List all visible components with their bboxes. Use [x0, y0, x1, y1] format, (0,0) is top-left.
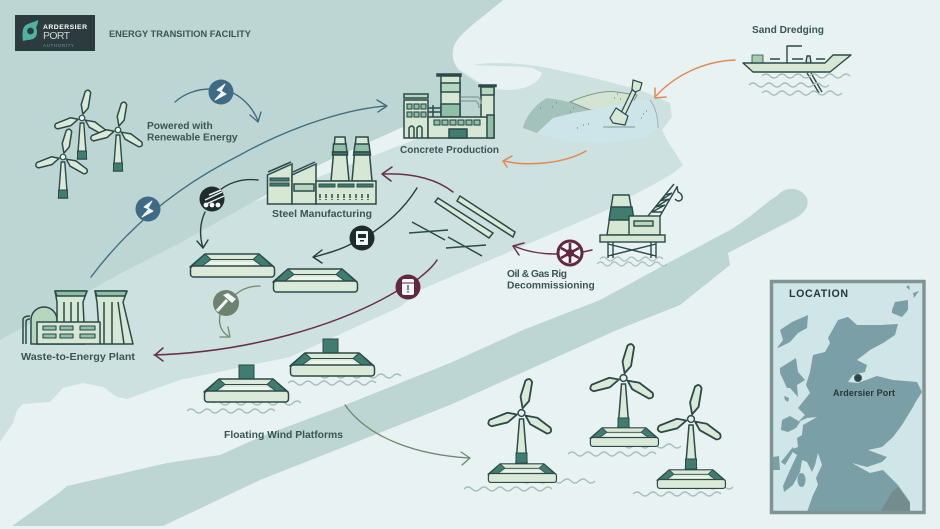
- background: mid land band: [0, 63, 683, 442]
- wind turbines: onshore group: [35, 89, 144, 198]
- arrow: platforms to offshore: [345, 405, 470, 465]
- floating turbine 1: [464, 378, 595, 491]
- label: oil and gas rig decommissioning: Decommissioning: [507, 280, 595, 292]
- icon: waste-to-energy plant: [23, 291, 133, 344]
- front mound: [537, 100, 658, 143]
- icon: lightning in circle: [136, 196, 160, 222]
- floating turbine 2: [568, 343, 681, 456]
- floating platform B with waves: [288, 339, 401, 385]
- label: powered with renewable energy: Renewable Energy: [147, 132, 238, 144]
- panel: location map: [772, 282, 924, 512]
- label: powered with renewable energy: Powered with: [147, 121, 213, 132]
- label: oil and gas rig decommissioning: Oil & Gas Rig: [507, 269, 567, 280]
- arrow: renewable power: [175, 89, 261, 122]
- arrow: steel to platform: [197, 180, 258, 248]
- title: ENERGY TRANSITION FACILITY: [109, 28, 252, 39]
- label: ardersier port: Ardersier Port: [833, 388, 895, 398]
- arrow: waste energy to concrete: [91, 100, 387, 277]
- label: sand dredging: Sand Dredging: [752, 25, 824, 36]
- icon: decommissioned steel beams: [409, 196, 515, 256]
- icon: recycle in circle: [558, 241, 582, 265]
- sand heap: [523, 80, 658, 143]
- label: floating wind platforms: Floating Wind Platforms: [224, 430, 343, 441]
- icon: lightning in circle: [208, 80, 234, 104]
- icon: dredging ship: [743, 46, 851, 93]
- waves under ship: [749, 74, 850, 95]
- map marker: [854, 374, 862, 382]
- label: steel manufacturing: Steel Manufacturing: [272, 209, 372, 220]
- arrow: rig to beams: [513, 243, 592, 255]
- logo: PORT: [43, 30, 71, 42]
- background: diagonal sandbank band: [12, 189, 808, 526]
- arrow: scrap to waste energy: [154, 260, 437, 361]
- icon: offshore rig: [600, 184, 682, 258]
- logo: [15, 15, 95, 51]
- icon: steel manufacturing plant: [268, 137, 376, 204]
- logo: AUTHORITY: [43, 43, 74, 48]
- label: location: LOCATION: [789, 288, 848, 300]
- label: concrete production: Concrete Production: [400, 145, 499, 156]
- frame: [772, 282, 924, 512]
- arrow: assembly: [219, 286, 260, 337]
- icon: hammer in circle: [213, 290, 239, 316]
- platform: under construction right: [273, 269, 358, 292]
- arrow: beams to steel: [382, 167, 453, 192]
- icon: steel coils in circle: [200, 186, 224, 212]
- waves under rig: [597, 257, 667, 266]
- mound edge: [650, 100, 658, 128]
- floating platform A with waves: [187, 365, 301, 413]
- middle mound green: [570, 92, 637, 110]
- background: dark upper-left land: [0, 0, 503, 340]
- label: waste-to-energy plant: Waste-to-Energy Plant: [21, 352, 136, 363]
- back mound dark: [523, 98, 590, 133]
- icon: barrel in circle: [396, 274, 420, 300]
- arrow: sand to concrete: [503, 151, 586, 167]
- map: Scotland land: [773, 285, 922, 512]
- logo: ARDERSIER: [43, 24, 87, 31]
- arrow: reused steel to platform: [313, 188, 417, 263]
- map: England: [880, 487, 910, 512]
- shovel: [603, 80, 642, 127]
- sand speckles: [540, 94, 647, 128]
- arrow: dredged sand to heap: [655, 60, 735, 98]
- icon: concrete production plant: [404, 74, 496, 138]
- icon: plate in circle: [350, 226, 374, 250]
- floating turbine 3: [633, 384, 733, 496]
- platform: under construction left: [190, 254, 274, 277]
- icon: logo swirl: [23, 20, 38, 41]
